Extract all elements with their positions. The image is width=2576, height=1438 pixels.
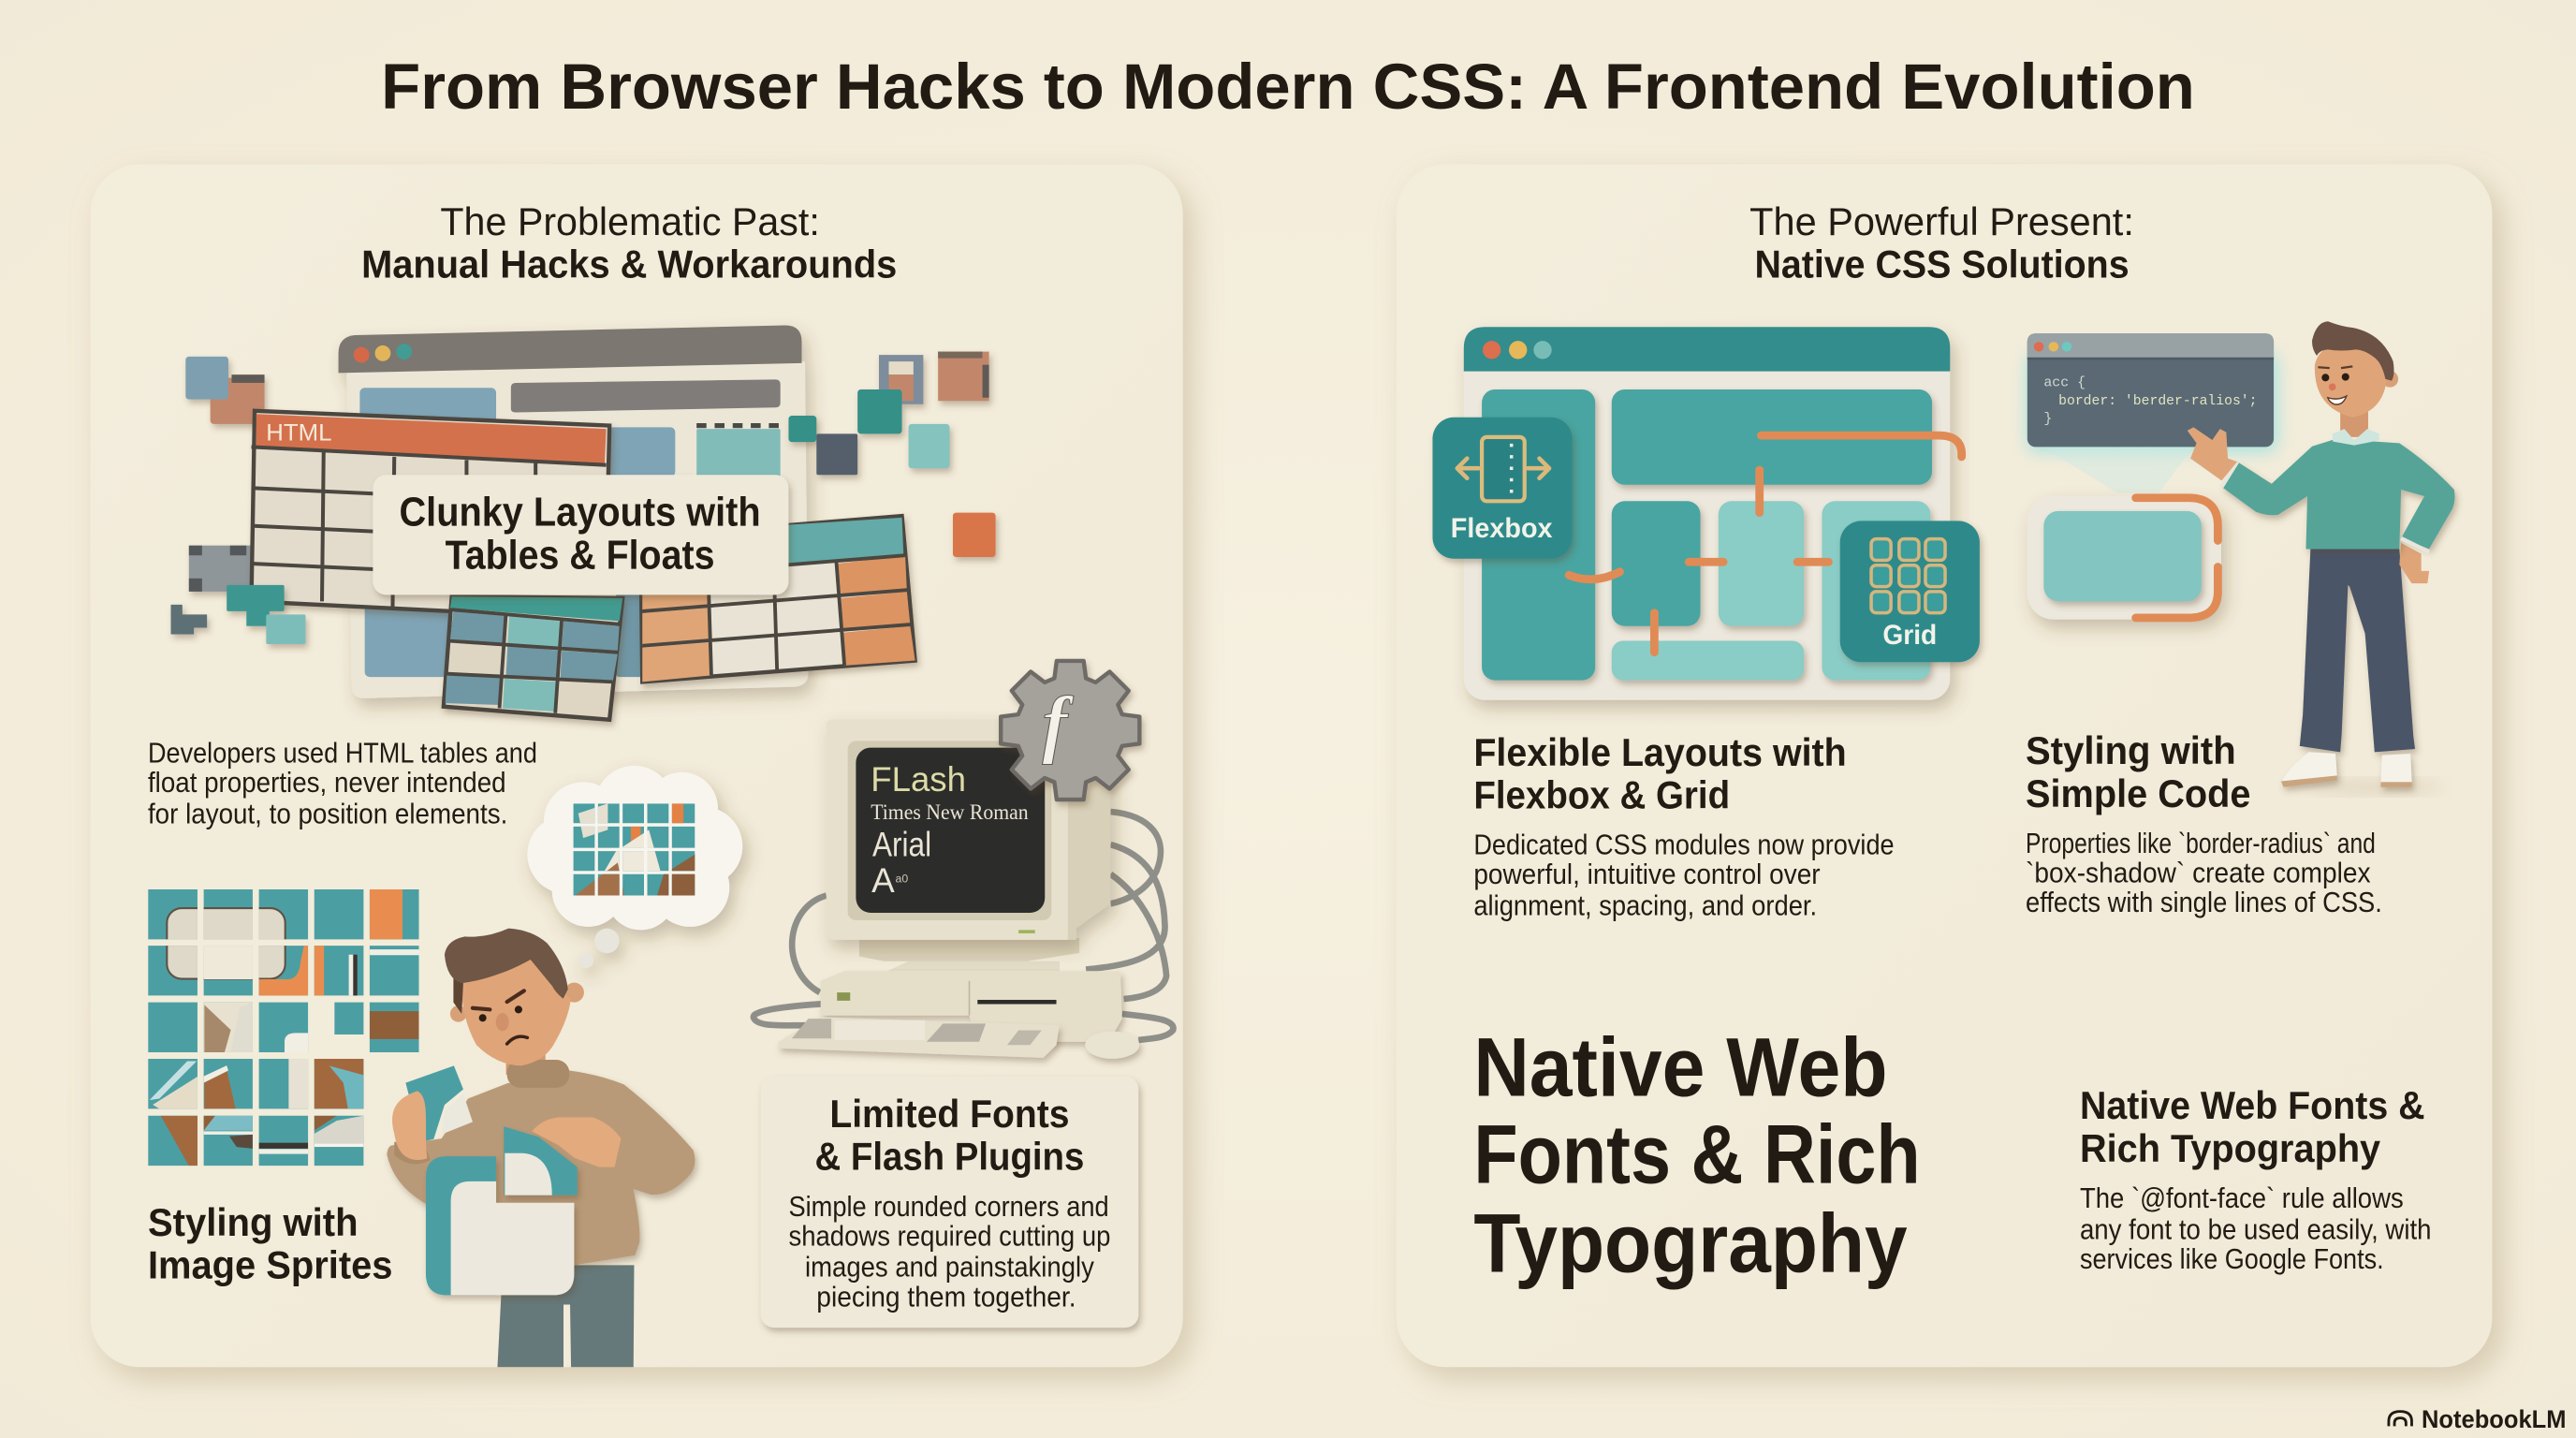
scattered pieces left — [171, 357, 266, 634]
panel heading: past — [361, 199, 897, 286]
text: styling with image sprites: Styling with — [148, 1200, 359, 1244]
box: limited fonts and flash plugins — [761, 1077, 1138, 1328]
screen text: Arial — [872, 825, 931, 863]
sweater — [387, 1070, 695, 1265]
label box: clunky layouts: Clunky Layouts with — [399, 490, 761, 536]
ground shadow under character — [2305, 781, 2443, 794]
text: developers used tables: float properties, never intended — [148, 766, 506, 799]
cables — [754, 812, 1173, 1040]
code window: border: 'berder-ralios'; — [2058, 394, 2258, 409]
angry face — [473, 990, 524, 1009]
right hand — [532, 1117, 621, 1167]
grid tile: Grid — [1882, 620, 1937, 651]
text: styling with image sprites: Image Sprites — [148, 1242, 392, 1286]
illustration: image sprites grid — [148, 889, 420, 1167]
text: styling with simple code — [2026, 728, 2382, 918]
text: developers used tables: for layout, to position elements. — [148, 797, 507, 829]
gear with f — [1001, 661, 1139, 800]
smile face — [2321, 374, 2329, 381]
base unit — [821, 971, 1122, 1042]
text: developers used tables — [148, 736, 537, 829]
flexbox tile — [1432, 418, 1573, 559]
illustration: flexbox and grid browser — [1432, 327, 1980, 700]
panel heading: past: Manual Hacks & Workarounds — [361, 242, 897, 286]
screen text: Times New Roman — [871, 800, 1029, 825]
box: limited fonts and flash plugins: Simple rounded corners and — [788, 1190, 1109, 1223]
ear right — [564, 983, 584, 1003]
text: flexible layouts — [1473, 730, 1895, 922]
label box: clunky layouts: Tables & Floats — [446, 532, 714, 578]
text: styling with image sprites — [148, 1200, 392, 1286]
text: styling with simple code: Simple Code — [2026, 771, 2250, 815]
hand on hip — [2399, 543, 2429, 583]
gear with f: f — [1042, 682, 1074, 765]
pointing hand — [2188, 427, 2237, 480]
left card and hand — [442, 1093, 473, 1135]
ear — [2382, 371, 2398, 388]
legs — [497, 1265, 634, 1367]
box: limited fonts and flash plugins: shadows required cutting up — [788, 1219, 1110, 1252]
left cuff — [394, 1142, 431, 1164]
neck — [2340, 411, 2368, 437]
screen text: a0 — [896, 872, 908, 885]
panel: the problematic past — [91, 165, 1183, 1367]
panel heading: past: The Problematic Past: — [440, 199, 820, 243]
flexbox tile: Flexbox — [1451, 513, 1553, 544]
text: native web fonts: The `@font-face` rule allows — [2080, 1181, 2404, 1214]
illustration: clunky tables and floats — [171, 326, 996, 720]
text: styling with simple code: `box-shadow` create complex — [2026, 856, 2371, 888]
large type specimen: Native Web — [1473, 1020, 1888, 1114]
teal-blue table — [444, 596, 622, 720]
sweater and arms — [2221, 440, 2455, 550]
head — [461, 956, 571, 1065]
panel heading: present — [1749, 199, 2134, 286]
trousers — [2300, 549, 2415, 752]
screen text: A — [871, 861, 895, 900]
text: developers used tables: Developers used HTML tables and — [148, 736, 537, 769]
text: native web fonts — [2080, 1083, 2432, 1275]
label box: clunky layouts — [373, 475, 788, 594]
head — [2315, 342, 2387, 418]
html table — [252, 411, 609, 611]
code window: } — [2043, 412, 2052, 427]
screen text: FLash — [871, 760, 966, 799]
text: flexible layouts: Dedicated CSS modules now provide — [1473, 829, 1895, 861]
box: limited fonts and flash plugins: Limited Fonts — [829, 1092, 1070, 1136]
large type specimen — [1473, 1020, 1921, 1289]
text: flexible layouts: Flexbox & Grid — [1473, 773, 1730, 817]
thought bubble — [527, 766, 742, 968]
torn sprite card — [426, 1126, 578, 1295]
panel heading: present: Native CSS Solutions — [1754, 242, 2130, 286]
hair — [2312, 321, 2394, 381]
text: styling with simple code: Properties like `border-radius` and — [2026, 827, 2376, 859]
code window: acc { — [2043, 375, 2086, 390]
grid tile — [1840, 521, 1980, 662]
panel: the powerful present — [1397, 165, 2492, 1367]
title: From Browser Hacks to Modern CSS: A Frontend Evolution — [381, 51, 2195, 123]
orange table — [640, 516, 915, 682]
character: pointing developer — [2188, 321, 2455, 787]
rounded preview tile — [2027, 496, 2221, 620]
monitor — [827, 719, 1110, 940]
ear left — [450, 1005, 466, 1022]
shoes — [2281, 752, 2412, 787]
screen text — [871, 760, 1029, 900]
text: flexible layouts: alignment, spacing, and order. — [1473, 889, 1817, 922]
code window — [2027, 333, 2274, 447]
floating pieces over table — [227, 585, 305, 644]
text: flexible layouts: Flexible Layouts with — [1473, 730, 1847, 774]
mouse — [1085, 1032, 1139, 1059]
large type specimen: Fonts & Rich — [1473, 1108, 1921, 1201]
character: frustrated developer — [387, 929, 695, 1367]
text: styling with simple code: effects with single lines of CSS. — [2026, 886, 2382, 918]
collar — [2333, 429, 2379, 446]
neck — [506, 1045, 546, 1075]
monitor chin — [859, 938, 1079, 961]
text: native web fonts: Rich Typography — [2080, 1126, 2381, 1170]
illustration: retro computer with flash — [754, 661, 1173, 1059]
stand foot — [884, 961, 1060, 981]
text: native web fonts: Native Web Fonts & — [2080, 1083, 2425, 1127]
sideburn — [453, 970, 463, 1014]
brand mark: notebooklm: NotebookLM — [2422, 1404, 2566, 1433]
box: limited fonts and flash plugins: piecing them together. — [816, 1280, 1076, 1313]
text: native web fonts: services like Google Fonts. — [2080, 1242, 2384, 1275]
html table: HTML — [266, 420, 332, 446]
cuffs — [2221, 462, 2429, 552]
text: native web fonts: any font to be used easily, with — [2080, 1212, 2432, 1245]
illustration: code window and preview — [2027, 333, 2277, 620]
back browser window — [339, 326, 809, 698]
hair — [445, 929, 568, 999]
box: limited fonts and flash plugins: & Flash Plugins — [815, 1135, 1084, 1179]
box: limited fonts and flash plugins: images and painstakingly — [805, 1251, 1094, 1284]
orange connectors — [1569, 435, 1962, 653]
text: styling with simple code: Styling with — [2026, 728, 2236, 772]
turtleneck — [507, 1060, 569, 1088]
scattered pieces right — [788, 352, 996, 557]
large type specimen: Typography — [1473, 1196, 1908, 1289]
text: flexible layouts: powerful, intuitive control over — [1473, 858, 1821, 890]
keyboard — [779, 1017, 1060, 1058]
panel heading: present: The Powerful Present: — [1749, 199, 2134, 243]
